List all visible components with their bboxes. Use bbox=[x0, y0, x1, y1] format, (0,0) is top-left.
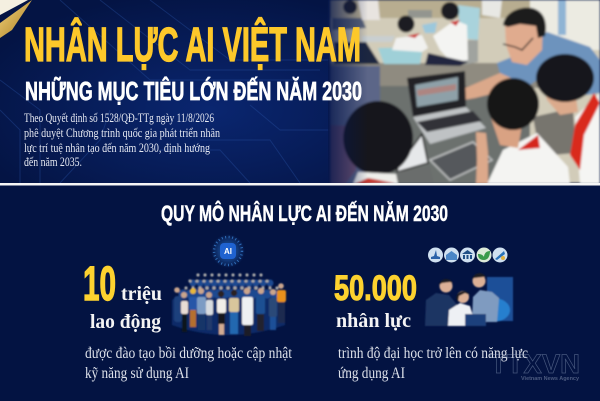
description: trình độ đại học trở lên có năng lực bbox=[338, 345, 528, 362]
photo: teacher and students with laptop bbox=[330, 0, 600, 184]
intro text: lực trí tuệ nhân tạo đến năm 2030, định hướng bbox=[24, 141, 211, 155]
illustration: three professionals with server bbox=[425, 273, 513, 326]
white divider bbox=[0, 183, 600, 186]
subtitle: NHỮNG MỤC TIÊU LỚN ĐẾN NĂM 2030 bbox=[25, 76, 362, 106]
description: được đào tạo bồi dưỡng hoặc cập nhật bbox=[85, 345, 293, 362]
panel: 10 million workers bbox=[83, 234, 293, 382]
number: 10: 10 bbox=[83, 258, 116, 311]
description: ứng dụng AI bbox=[338, 365, 405, 382]
panel: 50,000 personnel bbox=[334, 248, 528, 382]
icon: AI chip: AI bbox=[224, 247, 232, 256]
title: NHÂN LỰC AI VIỆT NAM bbox=[24, 17, 361, 72]
label: nhân lực: nhân lực bbox=[336, 310, 411, 332]
corner ornament bbox=[0, 0, 32, 38]
intro text: đến năm 2035. bbox=[24, 155, 82, 169]
laptop bbox=[407, 71, 466, 117]
number: 50.000: 50.000 bbox=[334, 269, 417, 308]
panel: header background bbox=[0, 0, 380, 183]
photo fade overlay bbox=[328, 0, 368, 183]
label: lao động: lao động bbox=[90, 311, 161, 333]
icon: AI chip bbox=[211, 234, 245, 268]
teacher bbox=[533, 108, 576, 156]
intro text bbox=[24, 111, 221, 169]
description bbox=[338, 345, 528, 382]
illustration: crowd of workers bbox=[172, 275, 286, 336]
label: triệu: triệu bbox=[121, 283, 162, 305]
watermark: TTXVN: TTXVN bbox=[490, 349, 580, 379]
intro text: phê duyệt Chương trình quốc gia phát triển nhân bbox=[24, 126, 221, 140]
student right bbox=[575, 93, 600, 184]
section heading: QUY MÔ NHÂN LỰC AI ĐẾN NĂM 2030 bbox=[161, 201, 448, 226]
intro text: Theo Quyết định số 1528/QĐ-TTg ngày 11/8/2026 bbox=[24, 111, 214, 125]
icons: five sector badges bbox=[428, 248, 508, 262]
description: kỹ năng sử dụng AI bbox=[85, 365, 189, 382]
student middle bbox=[487, 133, 570, 184]
student left bbox=[330, 125, 356, 184]
watermark: TTXVN: Vietnam News Agency bbox=[521, 376, 580, 382]
description bbox=[85, 345, 293, 382]
tablets bbox=[430, 142, 492, 180]
